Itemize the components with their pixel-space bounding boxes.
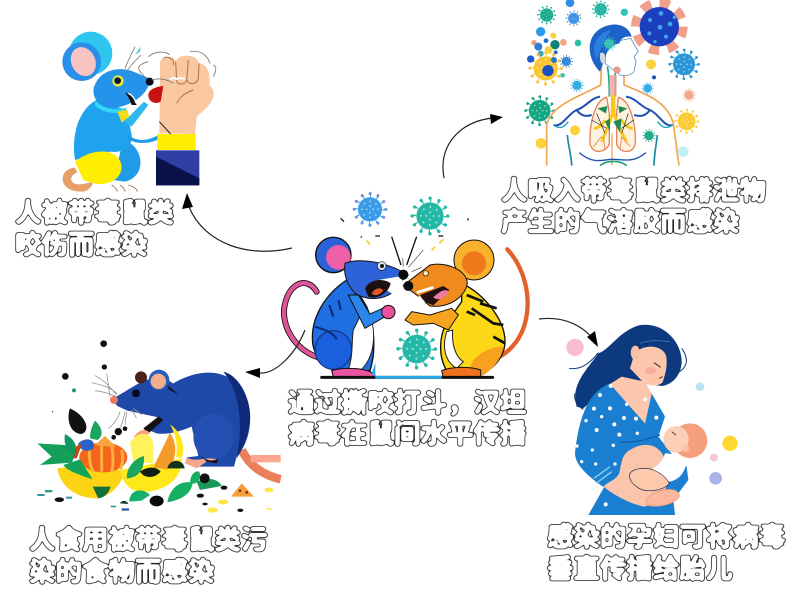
caption: bite transmission: 咬伤而感染 (15, 230, 148, 260)
caption: food transmission (29, 525, 268, 587)
caption: aerosol transmission: 产生的气溶胶而感染 (501, 207, 740, 237)
caption: vertical transmission: 感染的孕妇可将病毒 (547, 522, 786, 552)
illustration: two rats fighting (284, 193, 528, 377)
illustration: inhaled aerosol and lungs (526, 0, 698, 166)
arrow: centre to bitten hand (182, 193, 292, 251)
left rat (284, 283, 318, 357)
caption: vertical transmission: 垂直传播给胎儿 (547, 554, 732, 584)
arrow: centre to contaminated food (245, 330, 305, 378)
caption: vertical transmission (547, 522, 786, 584)
arrow: centre to inhalation scene (443, 114, 503, 178)
illustration: rat biting a human hand (62, 32, 216, 192)
right rat (498, 249, 528, 357)
illustration: pregnant mother with baby (566, 325, 738, 515)
caption: rat-to-rat horizontal transmission (288, 388, 527, 449)
bowl of food (57, 463, 125, 498)
caption: rat-to-rat horizontal transmission: 通过撕咬打斗，汉坦 (288, 388, 526, 418)
caption: bite transmission: 人被带毒鼠类 (15, 198, 174, 228)
caption: food transmission: 人食用被带毒鼠类污 (29, 525, 268, 555)
body outline (547, 67, 679, 166)
illustration: rat contaminating food (37, 340, 281, 513)
caption: bite transmission (15, 198, 174, 260)
caption: aerosol transmission (501, 176, 766, 237)
arrow: centre to pregnant mother (539, 318, 598, 347)
caption: rat-to-rat horizontal transmission: 病毒在鼠间水平传播 (288, 419, 527, 449)
caption: food transmission: 染的食物而感染 (29, 557, 214, 587)
caption: aerosol transmission: 人吸入带毒鼠类排泄物 (501, 176, 766, 206)
